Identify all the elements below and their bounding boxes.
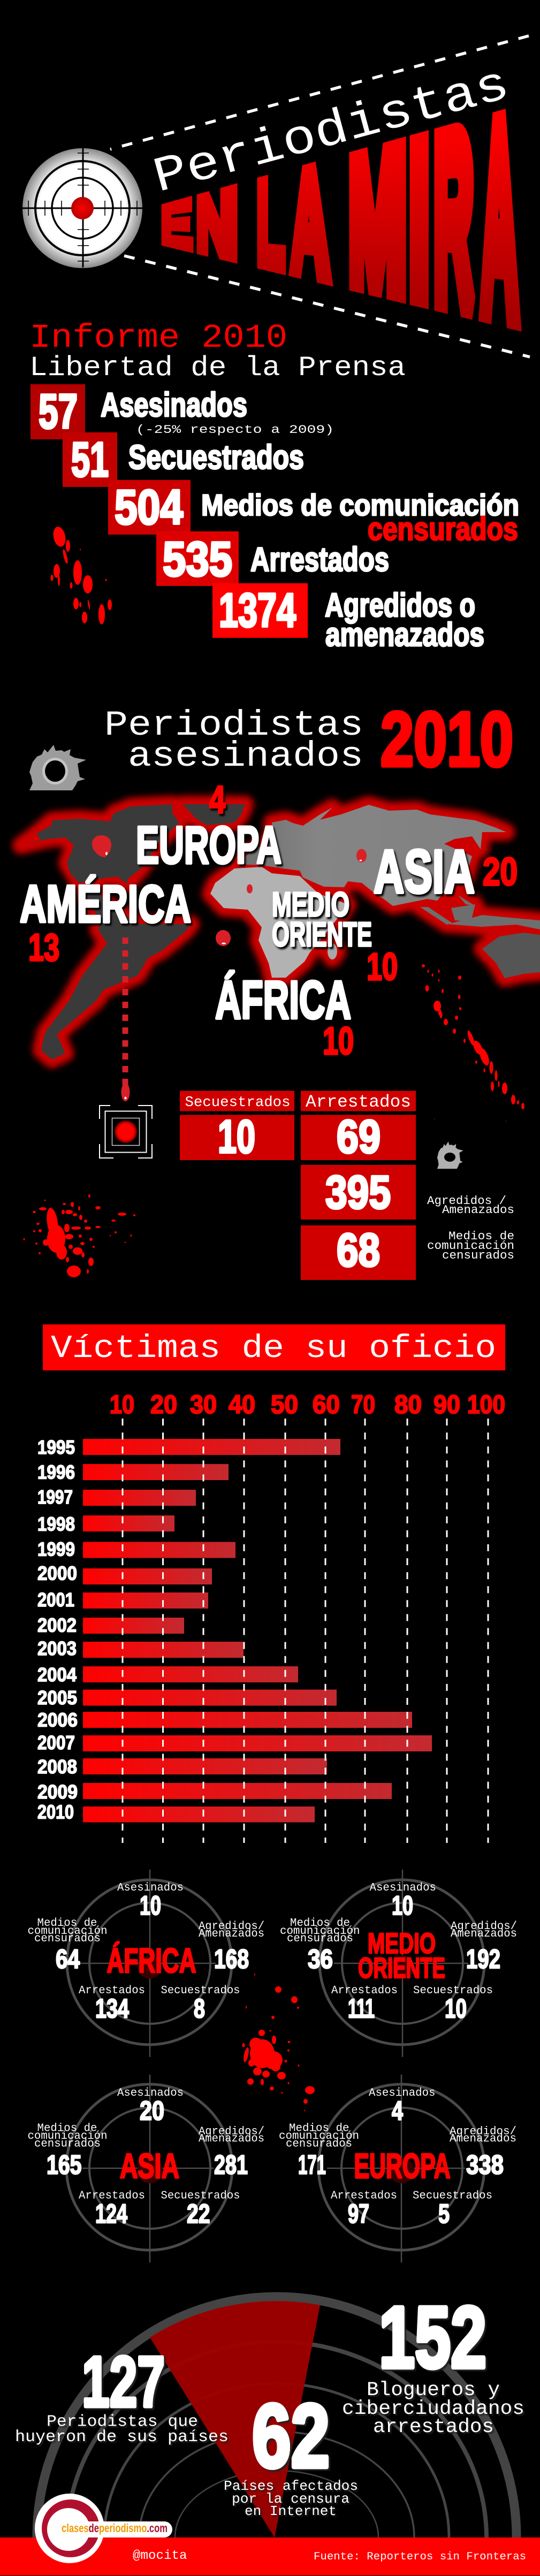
year labels: 2010 [37, 1801, 74, 1823]
table: Agredidos row: Amenazados [442, 1203, 514, 1217]
title: Periodistas: Periodistas [148, 57, 515, 206]
label: Medio Oriente 10: 10 [367, 946, 398, 988]
heading: Periodistas asesinados: asesinados [128, 736, 363, 776]
target: Medio Oriente: Amenazados [451, 1928, 517, 1940]
label: Africa 10 [215, 970, 354, 1063]
label: Africa 10: ÁFRICA [215, 970, 351, 1030]
table: Medios row [301, 1224, 514, 1280]
stat: asesinados: Asesinados [101, 386, 247, 424]
target: Medio Oriente: Agredidos/ [451, 1920, 517, 1933]
axis labels: 50 [271, 1391, 298, 1419]
stat: medios censurados: 504 [115, 481, 183, 535]
title: EN LA MIRA: A [471, 57, 478, 359]
stat: 62 paises [224, 2386, 358, 2519]
label: Europa 4 [136, 779, 282, 874]
stat: agredidos [212, 583, 484, 653]
map labels [20, 779, 518, 1063]
map dashed drop line [122, 938, 128, 1086]
target: Africa: Arrestados [79, 1985, 145, 1997]
stat: 62 paises: Países afectados [224, 2478, 358, 2494]
target: Medio Oriente: 192 [466, 1944, 500, 1974]
icon: bullet hole small [437, 1141, 463, 1169]
table: Secuestrados column: 10 [218, 1111, 255, 1163]
target rings [320, 1870, 484, 2057]
target: Asia [28, 2075, 264, 2262]
target: Medio Oriente: censurados [287, 1933, 353, 1945]
heading: Periodistas asesinados [104, 705, 363, 776]
target: Medio Oriente: Medios de [290, 1917, 350, 1930]
axis labels: 30 [190, 1391, 217, 1419]
target rings [318, 2075, 484, 2262]
target: Europa: EUROPA [354, 2146, 451, 2185]
logo: clasesdeperiodismo.com [35, 2494, 172, 2563]
stat: 62 paises: en Internet [245, 2503, 337, 2519]
target: Asia: censurados [34, 2138, 101, 2150]
continent: Africa [210, 867, 348, 978]
axis labels: 20 [150, 1391, 177, 1419]
label: Medio Oriente 10 [272, 885, 398, 988]
target: Africa: 168 [214, 1944, 249, 1974]
label: Europa 4: 4 [209, 779, 225, 821]
year labels: 2008 [37, 1756, 77, 1778]
year labels: 2002 [37, 1614, 77, 1636]
target: Medio Oriente [280, 1870, 517, 2057]
target: Africa: ÁFRICA [107, 1941, 196, 1980]
footer bar [0, 2537, 540, 2575]
label: Europa 4: EUROPA [136, 816, 282, 874]
heading: Libertad de la Prensa: Libertad de la Prensa [29, 352, 406, 384]
axis labels: 70 [351, 1391, 375, 1419]
title: EN LA MIRA: M [336, 86, 349, 318]
table: Medios row: Medios de [448, 1230, 514, 1243]
target: Africa: 8 [194, 1994, 205, 2024]
target: Asia: Medios de [37, 2122, 97, 2135]
stat: 152 blogueros: 152 [379, 2288, 486, 2386]
target: Asia: Amenazados [199, 2133, 264, 2145]
year labels: 2009 [37, 1781, 78, 1803]
bars [83, 1439, 432, 1823]
target: Europa: Asesinados [369, 2087, 436, 2100]
target: Africa: Agredidos/ [199, 1920, 264, 1933]
title: EN LA MIRA [139, 57, 522, 359]
dashed sight lines [110, 36, 530, 357]
stat: arrestados: 535 [163, 532, 232, 586]
title: EN LA MIRA: A [275, 110, 287, 293]
title: EN LA MIRA: R [427, 71, 435, 346]
target: Africa: Secuestrados [161, 1985, 240, 1997]
axis labels: 60 [313, 1391, 340, 1419]
label: America 13: AMÉRICA [20, 874, 191, 933]
target: Africa: Asesinados [117, 1882, 184, 1894]
target: Asia: Agredidos/ [199, 2125, 264, 2138]
year labels: 2000 [37, 1563, 77, 1584]
axis labels: 100 [467, 1391, 505, 1419]
target: Europa: comunicación [279, 2130, 359, 2143]
target: Africa: 64 [56, 1944, 80, 1974]
stat: 152 blogueros [342, 2288, 524, 2438]
target: Europa: Arrestados [331, 2190, 397, 2202]
stat: asesinados: 57 [39, 385, 78, 439]
target: Medio Oriente: ORIENTE [358, 1952, 445, 1984]
stat: agredidos: Agredidos o [325, 587, 475, 624]
target: Medio Oriente: Secuestrados [413, 1985, 493, 1997]
stat: secuestrados [63, 432, 304, 487]
stat: 152 blogueros: ciberciudadanos [342, 2398, 524, 2420]
year labels: 1996 [37, 1461, 75, 1483]
axis labels: 40 [229, 1391, 255, 1419]
axis labels: 80 [394, 1391, 422, 1419]
target: Medio Oriente: Arrestados [331, 1985, 398, 1997]
target: Asia: 165 [47, 2150, 81, 2180]
year labels: 2005 [37, 1687, 77, 1709]
stat: arrestados: Arrestados [250, 541, 389, 578]
stat: 127 periodistas: 127 [82, 2342, 165, 2422]
target: Africa: comunicación [28, 1925, 107, 1938]
target: Africa [28, 1870, 264, 2057]
target: Africa: 10 [140, 1891, 161, 1920]
stat: 152 blogueros: arrestados [373, 2416, 494, 2438]
blood trail: right of map [422, 964, 524, 1122]
table: Agredidos row: Agredidos / [427, 1194, 506, 1208]
blood spatter: left of staircase [50, 525, 112, 624]
table: Secuestrados column [180, 1091, 294, 1163]
target: Africa: Amenazados [199, 1928, 264, 1940]
year labels: 1998 [37, 1513, 75, 1535]
year labels: 1995 [37, 1436, 75, 1458]
axis labels: 90 [433, 1391, 460, 1419]
year labels: 2006 [37, 1709, 78, 1731]
heading: Informe 2010: Informe 2010 [29, 319, 287, 357]
label: America 13: 13 [28, 927, 59, 969]
continent: Eurasia [238, 805, 506, 906]
target: Asia: 22 [187, 2199, 210, 2229]
stat: asesinados [31, 384, 334, 439]
year labels: 1999 [37, 1538, 75, 1560]
target: Medio Oriente: 10 [445, 1994, 467, 2024]
target: Medio Oriente: MEDIO [368, 1927, 436, 1960]
stat: 62 paises: 62 [252, 2386, 330, 2486]
target: Europa [279, 2075, 516, 2262]
target rings [67, 1870, 232, 2057]
label: Asia 20: 20 [483, 850, 518, 894]
radar red sector [150, 2301, 320, 2537]
stat: agredidos: amenazados [325, 616, 484, 653]
target rings [66, 2075, 232, 2262]
target: Europa: 338 [466, 2150, 504, 2180]
logo: clasesdeperiodismo.com: clasesdeperiodismo.com [62, 2521, 168, 2535]
bar chart: victims per year [37, 1391, 505, 1843]
world map [21, 804, 540, 1060]
label: Medio Oriente 10: ORIENTE [272, 915, 372, 954]
target: Asia: 281 [214, 2150, 248, 2180]
target: Medio Oriente: comunicación [280, 1925, 360, 1938]
target: Europa: Agredidos/ [450, 2125, 516, 2138]
continent: Oceania [420, 895, 540, 978]
target: Europa: Amenazados [450, 2133, 516, 2145]
stat: 127 periodistas: huyeron de sus países [15, 2428, 229, 2447]
target: Africa: censurados [34, 1933, 101, 1945]
target: Asia: 124 [95, 2199, 127, 2229]
table: Arrestados column [301, 1091, 416, 1163]
target: Medio Oriente: 111 [348, 1994, 375, 2024]
target: Asia: 20 [140, 2095, 164, 2125]
table: Arrestados column: 69 [337, 1111, 381, 1163]
stat: secuestrados: Secuestrados [128, 439, 304, 476]
label: Medio Oriente 10: MEDIO [272, 885, 349, 924]
target: Asia: Secuestrados [161, 2190, 240, 2202]
title: EN LA MIRA: E [139, 134, 162, 255]
target: Asia: comunicación [28, 2130, 107, 2143]
stat: secuestrados: 51 [71, 433, 109, 487]
stat: agredidos: 1374 [219, 583, 296, 637]
table: Agredidos row: 395 [325, 1167, 391, 1218]
target: Africa: Medios de [37, 1917, 97, 1930]
target: Medio Oriente: 36 [308, 1944, 333, 1974]
axis labels: 10 [110, 1391, 134, 1419]
table: Medios row: comunicación [427, 1239, 514, 1253]
year labels: 2007 [37, 1732, 75, 1754]
year labels: 1997 [37, 1486, 73, 1508]
target: Europa: censurados [286, 2138, 352, 2150]
stat: medios censurados [108, 480, 519, 547]
continent: America [21, 804, 245, 1060]
year labels: 2003 [37, 1637, 77, 1659]
year labels: 2001 [37, 1589, 74, 1611]
table: Medios row: 68 [337, 1224, 380, 1276]
blood spatter: lower left [24, 1194, 135, 1277]
label: Africa 10: 10 [323, 1020, 354, 1063]
map glow [21, 804, 540, 1060]
target: Europa: 171 [298, 2150, 326, 2180]
year labels: 2004 [37, 1664, 77, 1686]
target: Europa: 97 [348, 2199, 369, 2229]
icon: bullet hole large [29, 745, 86, 790]
banner: Victimas de su oficio: Víctimas de su oficio [51, 1331, 496, 1367]
icon: rifle scope target [22, 148, 142, 268]
stat: 62 paises: por la censura [232, 2491, 349, 2507]
blood spatter: center [242, 1973, 315, 2112]
label: Asia 20: ASIA [374, 838, 475, 906]
source: Fuente: Reporteros sin Fronteras [314, 2551, 526, 2563]
target: Europa: Medios de [289, 2122, 349, 2135]
stat: arrestados [156, 531, 389, 586]
heading: Periodistas asesinados: Periodistas [104, 705, 363, 745]
credit: mocita: @mocita [133, 2549, 187, 2563]
target: Europa: 4 [392, 2095, 403, 2125]
dashed gridlines [123, 1419, 488, 1843]
table: Secuestrados column: Secuestrados [185, 1095, 290, 1111]
radar rings [37, 2297, 516, 2537]
blood drops on map [92, 835, 367, 946]
title: EN LA MIRA: N [176, 124, 197, 266]
label: America 13 [20, 874, 191, 969]
target: Asia: Arrestados [79, 2190, 145, 2202]
stat: 127 periodistas: Periodistas que [47, 2412, 198, 2432]
title: EN LA MIRA: L [247, 130, 258, 286]
year labels [37, 1436, 78, 1823]
blood drop and target marker [100, 1083, 152, 1158]
table: Medios row: censurados [442, 1249, 514, 1262]
stat: asesinados: (-25% respecto a 2009) [136, 423, 334, 437]
panel: press freedom staircase [31, 384, 519, 653]
table: Agredidos row [301, 1165, 514, 1220]
target: Europa: Secuestrados [413, 2190, 492, 2202]
title: EN LA MIRA: I [406, 90, 410, 338]
banner: Victimas de su oficio [43, 1324, 505, 1370]
target: Europa: 5 [438, 2199, 450, 2229]
axis labels [110, 1391, 505, 1419]
table: Arrestados column: Arrestados [306, 1092, 411, 1112]
stat: 152 blogueros: Blogueros y [367, 2379, 500, 2402]
target: Asia: ASIA [120, 2146, 179, 2185]
target: Asia: Asesinados [117, 2087, 184, 2100]
target: Africa: 134 [95, 1994, 129, 2024]
target: Medio Oriente: 10 [392, 1891, 413, 1920]
target: Medio Oriente: Asesinados [369, 1882, 436, 1894]
stat: 127 periodistas [15, 2342, 229, 2447]
